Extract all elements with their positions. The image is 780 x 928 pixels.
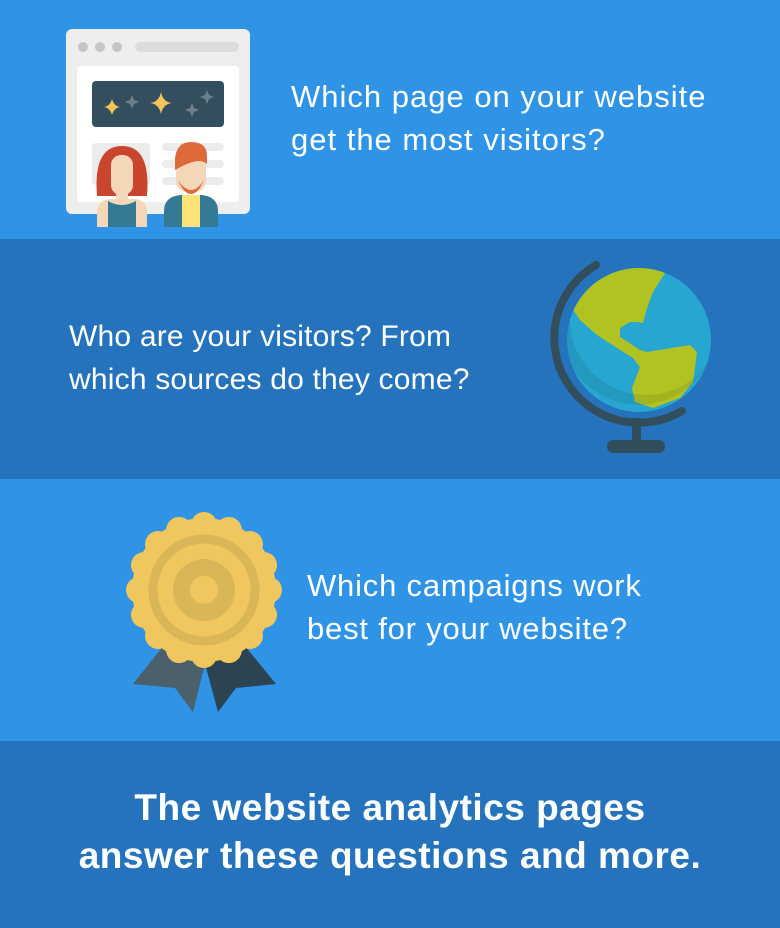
- icon: browser with visitors: [66, 29, 250, 227]
- text: question 1: [291, 79, 706, 157]
- icon: globe: [550, 261, 711, 453]
- panel: pages: [0, 0, 780, 239]
- panel: visitors: [0, 239, 780, 479]
- text: question 3: Which campaigns work: [307, 568, 642, 603]
- text: question 3: [307, 568, 642, 646]
- text: conclusion: The website analytics pages: [134, 787, 646, 828]
- icon: award badge: [126, 512, 282, 712]
- text: question 1: get the most visitors?: [291, 122, 606, 157]
- text: conclusion: [79, 787, 701, 876]
- text: question 1: Which page on your website: [291, 79, 706, 114]
- text: question 2: [69, 320, 470, 396]
- panel: campaigns: [0, 479, 780, 741]
- text: conclusion: answer these questions and more.: [79, 835, 701, 876]
- panel: conclusion: [0, 741, 780, 928]
- text: question 2: Who are your visitors? From: [69, 320, 451, 353]
- text: question 2: which sources do they come?: [69, 363, 470, 396]
- text: question 3: best for your website?: [307, 611, 628, 646]
